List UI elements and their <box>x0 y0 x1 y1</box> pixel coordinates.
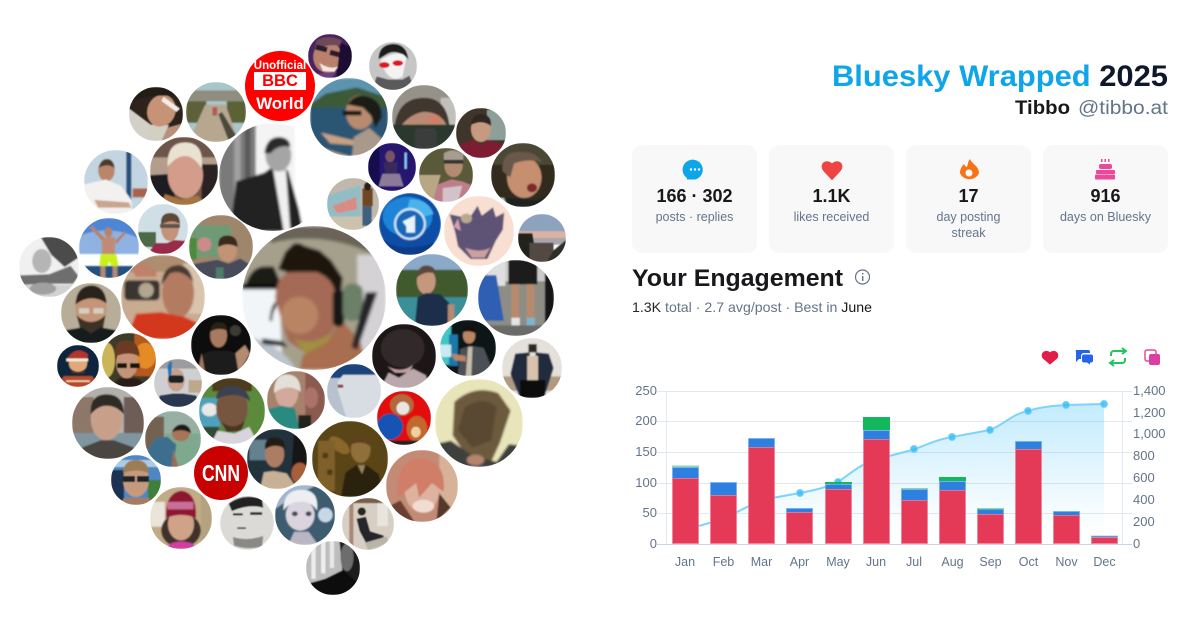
panel: day posting streak: streak <box>951 226 986 240</box>
right axis labels: 1,400 <box>1133 383 1166 398</box>
left axis labels: 100 <box>635 475 657 490</box>
left axis labels: 50 <box>643 505 657 520</box>
month labels: Apr <box>790 555 809 569</box>
avatar: giraffe painting <box>312 421 388 497</box>
avatar: purple dancer <box>368 143 416 191</box>
right axis labels: 1,200 <box>1133 405 1166 420</box>
right axis labels: 800 <box>1133 448 1155 463</box>
icon: heart <box>822 162 842 180</box>
user name: Tibbo <box>1015 98 1070 119</box>
icon: repost legend <box>1110 348 1126 366</box>
avatar: pink jacket man <box>138 204 188 254</box>
avatar: legs on pavement <box>478 260 554 336</box>
avatar: main headset portrait <box>242 226 386 370</box>
avatar: puppets <box>377 391 431 445</box>
icon: like legend <box>1042 351 1058 364</box>
avatar: blue t-shirt man <box>145 411 201 467</box>
avatar: tank selfie <box>247 429 308 489</box>
icon: birthday cake <box>1095 159 1115 180</box>
avatar: blue globe <box>379 193 441 255</box>
avatar: boat sunglasses <box>310 78 388 156</box>
avatar: curly hair <box>372 324 436 388</box>
avatar: BBC World logo: World <box>256 94 304 113</box>
right axis labels: 1,000 <box>1133 426 1166 441</box>
panel: likes received <box>769 145 894 253</box>
icon: info <box>856 270 870 284</box>
avatar: BBC World logo <box>245 51 315 121</box>
panel: posts and replies: 166 · 302 <box>656 186 733 206</box>
right axis labels <box>1133 383 1166 551</box>
heading: your engagement: Your Engagement <box>632 265 843 292</box>
avatar: blonde hair <box>150 137 218 205</box>
avatar: comic red glasses <box>369 42 417 90</box>
month labels: Feb <box>713 555 734 569</box>
avatar: white shirt man <box>84 150 148 214</box>
title: Bluesky Wrapped 2025 <box>832 60 1168 93</box>
icon: flame <box>960 159 979 179</box>
month labels: Nov <box>1055 555 1078 569</box>
avatar: camera mirror <box>342 498 394 550</box>
month labels: Jul <box>906 555 922 569</box>
avatar: selfie lying man <box>129 87 183 141</box>
month labels: Oct <box>1019 555 1039 569</box>
avatar: speaker on stage <box>440 320 496 376</box>
avatar: sketch face <box>220 496 274 550</box>
chart: engagement by month <box>635 383 1166 569</box>
stacked bars <box>672 417 1118 544</box>
right axis labels: 400 <box>1133 492 1155 507</box>
legend icons <box>1042 348 1160 366</box>
avatar: pink hair illustrated <box>386 450 458 522</box>
line and area: cumulative engagement <box>685 400 1108 544</box>
avatar: open-mouth man <box>491 143 555 207</box>
panel: day posting streak <box>906 145 1031 253</box>
avatar: CNN logo <box>194 446 248 500</box>
avatar: snorkel <box>154 359 202 407</box>
left axis labels <box>635 383 657 551</box>
avatar: floral shirt <box>419 148 473 202</box>
panel: posts and replies <box>632 145 757 253</box>
avatar: sunglasses fire <box>100 333 156 387</box>
avatar: black tank top <box>191 315 251 375</box>
avatar: granny <box>267 371 325 429</box>
avatar: black and white suit man <box>219 124 303 231</box>
right axis labels: 0 <box>1133 536 1140 551</box>
panel: day posting streak: day posting <box>937 210 1001 224</box>
right axis labels: 600 <box>1133 470 1155 485</box>
icon: reply legend <box>1076 350 1093 364</box>
avatar: airplane wing <box>327 364 381 418</box>
panel: likes received: 1.1K <box>812 186 851 206</box>
right axis labels: 200 <box>1133 514 1155 529</box>
panel: days on Bluesky: days on Bluesky <box>1060 210 1152 224</box>
month labels: Aug <box>941 555 964 569</box>
left axis labels: 200 <box>635 413 657 428</box>
avatar: art gallery <box>327 178 379 230</box>
panel: day posting streak: 17 <box>958 186 979 206</box>
month labels: May <box>826 555 851 569</box>
panel: days on Bluesky <box>1043 145 1168 253</box>
avatar: top of hair <box>435 379 523 467</box>
avatar: santa pixel <box>57 345 99 387</box>
avatar: sunset pier <box>518 214 566 262</box>
avatar: glasses beard <box>61 283 121 343</box>
icon: speech bubble <box>683 160 703 180</box>
month labels: Jan <box>675 555 695 569</box>
panel: days on Bluesky: 916 <box>1090 186 1121 206</box>
avatar: navy shirt man <box>396 254 468 326</box>
icon: quote legend <box>1145 350 1160 365</box>
avatar: red shirt man <box>456 108 506 158</box>
avatar: pergola path <box>186 82 246 142</box>
avatar: BBC World logo: Unofficial <box>254 60 306 72</box>
avatar: cat illustration <box>444 196 514 266</box>
engagement summary: 1.3K total · 2.7 avg/post · Best in June <box>632 299 872 315</box>
avatar: black and white bottom <box>306 541 360 595</box>
avatar: BBC World logo: BBC <box>262 72 298 90</box>
avatar: CNN logo: CNN <box>202 460 240 486</box>
month labels: Mar <box>751 555 772 569</box>
panel: likes received: likes received <box>794 210 869 224</box>
avatar: phone selfie red hoodie <box>121 255 205 339</box>
avatar: black and white arm <box>19 237 79 297</box>
month labels: Jun <box>866 555 886 569</box>
avatar: mirror blazer <box>502 338 562 398</box>
avatar: glasses man purple <box>308 34 352 78</box>
left axis labels: 0 <box>650 536 657 551</box>
month labels <box>675 555 1116 569</box>
avatar: green beard man <box>199 378 265 444</box>
avatar: sweater man <box>72 387 144 459</box>
avatar: sunglasses blue sky <box>111 455 161 505</box>
avatar: anime white hair <box>275 485 335 545</box>
user handle: @tibbo.at <box>1078 98 1169 119</box>
avatar: phone selfie heart <box>392 85 456 149</box>
avatar: green room man <box>189 215 253 279</box>
avatar: beanie woman <box>150 487 212 549</box>
left axis labels: 150 <box>635 444 657 459</box>
month labels: Sep <box>979 555 1002 569</box>
month labels: Dec <box>1093 555 1116 569</box>
avatar cluster <box>19 34 566 595</box>
left axis labels: 250 <box>635 383 657 398</box>
panel: posts and replies: posts · replies <box>656 210 733 224</box>
avatar: yellow shorts pool <box>79 218 139 278</box>
